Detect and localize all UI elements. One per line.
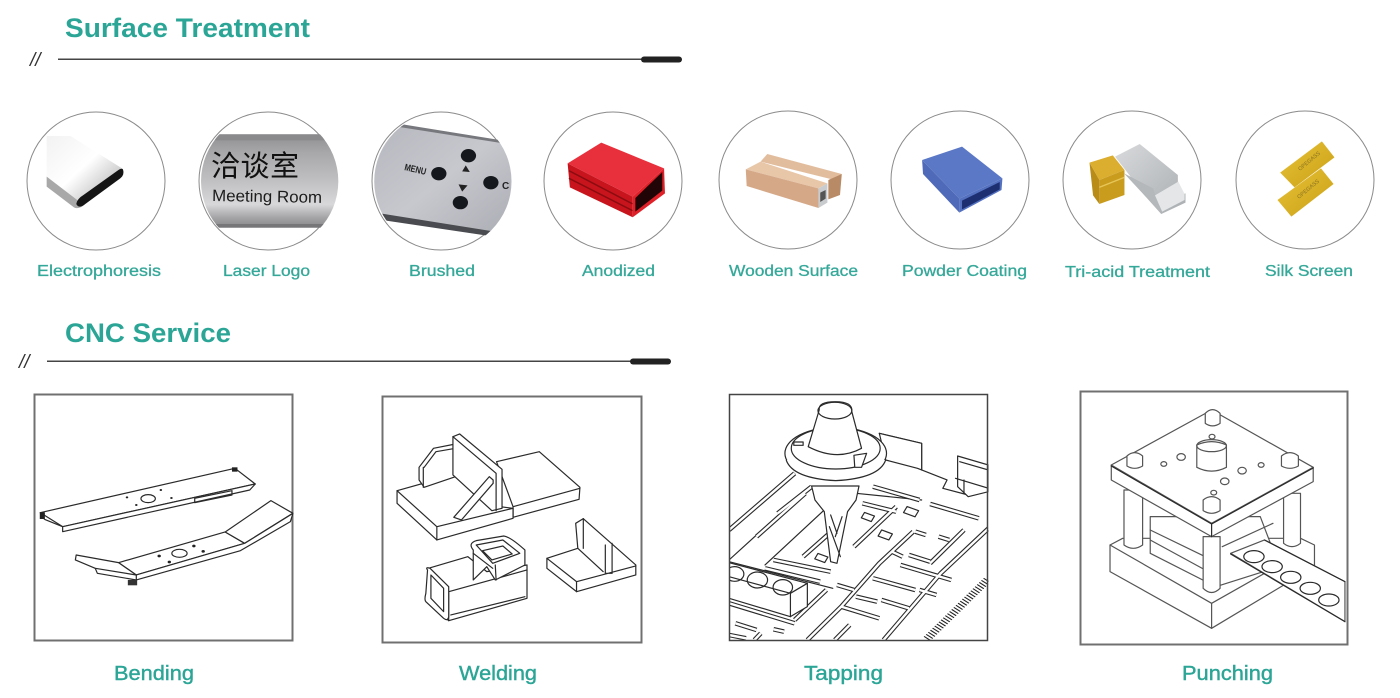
icon: brushed aluminium control panel: CF bbox=[502, 181, 515, 192]
label: Tri-acid Treatment bbox=[1065, 264, 1211, 281]
label: Powder Coating bbox=[902, 263, 1027, 280]
divider: surface treatment rule bbox=[28, 50, 682, 71]
heading: CNC Service: CNC Service bbox=[65, 318, 231, 348]
icon: gold printed plates bbox=[1277, 141, 1334, 217]
icon: engraved steel plate: Meeting Room bbox=[212, 187, 322, 207]
panel: Wooden Surface bbox=[719, 111, 858, 280]
label: Silk Screen bbox=[1265, 263, 1353, 280]
panel: Punching bbox=[1080, 392, 1348, 685]
panel: Bending bbox=[34, 394, 293, 685]
panel: Electrophoresis bbox=[27, 112, 165, 280]
panel: Silk Screen bbox=[1236, 111, 1374, 280]
label: Welding bbox=[459, 663, 537, 685]
diagram: welded parts bbox=[397, 434, 636, 621]
diagram: punching die set bbox=[1110, 410, 1345, 628]
panel: Welding bbox=[382, 396, 642, 685]
panel: Powder Coating bbox=[891, 111, 1029, 280]
panel: Anodized bbox=[544, 112, 682, 280]
icon: gold and silver extrusions bbox=[1089, 144, 1185, 214]
diagram: CNC tool cutting a plate bbox=[725, 402, 989, 640]
label: Laser Logo bbox=[223, 263, 310, 280]
panel: Tapping bbox=[725, 394, 989, 685]
icon: brushed aluminium control panel: MENU bbox=[403, 162, 427, 178]
icon: gold printed plates: OPEGASS bbox=[1297, 150, 1322, 173]
panel: Brushed bbox=[372, 112, 512, 276]
label: Bending bbox=[114, 663, 194, 685]
frame bbox=[730, 394, 988, 640]
label: Brushed bbox=[409, 263, 475, 280]
panel: Tri-acid Treatment bbox=[1063, 111, 1211, 281]
label: Anodized bbox=[582, 263, 655, 280]
icon: silver oval tube bbox=[47, 136, 124, 208]
label: Punching bbox=[1182, 663, 1273, 685]
icon: engraved steel plate: 洽谈室 bbox=[211, 150, 299, 183]
icon: engraved steel plate bbox=[197, 134, 341, 228]
icon: red extrusion box bbox=[568, 143, 665, 217]
divider: CNC service rule bbox=[17, 352, 671, 373]
divider: CNC service rule: // bbox=[17, 352, 31, 373]
label: Wooden Surface bbox=[729, 263, 858, 280]
diagram: bent metal strips bbox=[40, 467, 293, 585]
label: Tapping bbox=[804, 663, 883, 685]
panel: Laser Logo bbox=[197, 112, 341, 280]
icon: blue enclosure bbox=[922, 147, 1002, 213]
heading: Surface Treatment: Surface Treatment bbox=[65, 13, 310, 43]
divider: surface treatment rule: // bbox=[28, 50, 42, 71]
icon: brushed aluminium control panel bbox=[374, 124, 512, 236]
label: Electrophoresis bbox=[37, 263, 161, 280]
icon: wood-grain extrusion bbox=[746, 154, 842, 208]
icon: gold printed plates: OPEGASS bbox=[1296, 178, 1321, 201]
